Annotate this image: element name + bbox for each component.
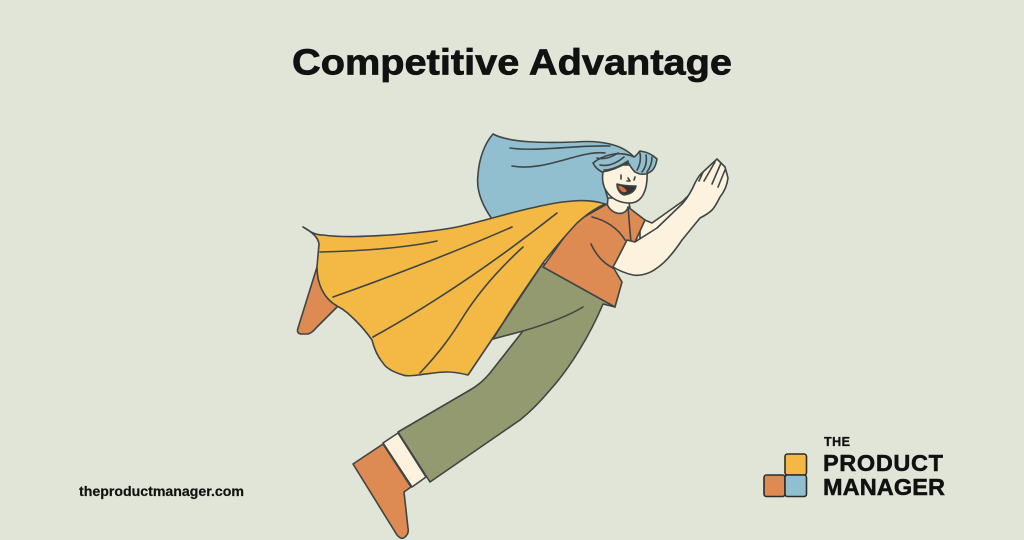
sock: [383, 433, 426, 487]
bangs: [593, 151, 657, 174]
website url: theproductmanager.com: [79, 484, 244, 499]
face: [603, 165, 647, 203]
logo icon: orange block: [764, 475, 785, 496]
front shoe: [353, 444, 411, 538]
logo icon: yellow block: [785, 454, 806, 475]
logo text: THE: [824, 435, 850, 449]
hair: [478, 134, 634, 225]
shirt: [543, 204, 645, 307]
back arm: [640, 192, 692, 250]
cape: [303, 201, 605, 376]
front arm and hand: [613, 159, 728, 275]
logo text: PRODUCT: [823, 450, 944, 476]
title: Competitive Advantage: [292, 42, 732, 82]
finger lines: [699, 162, 725, 187]
illustration: flying superhero: [298, 134, 728, 538]
logo: [764, 435, 945, 500]
neck: [607, 198, 630, 215]
logo icon: blue block: [785, 475, 806, 496]
leg: [398, 263, 615, 482]
logo text: MANAGER: [823, 474, 945, 500]
logo text: [823, 435, 945, 500]
back foot: [298, 267, 338, 334]
